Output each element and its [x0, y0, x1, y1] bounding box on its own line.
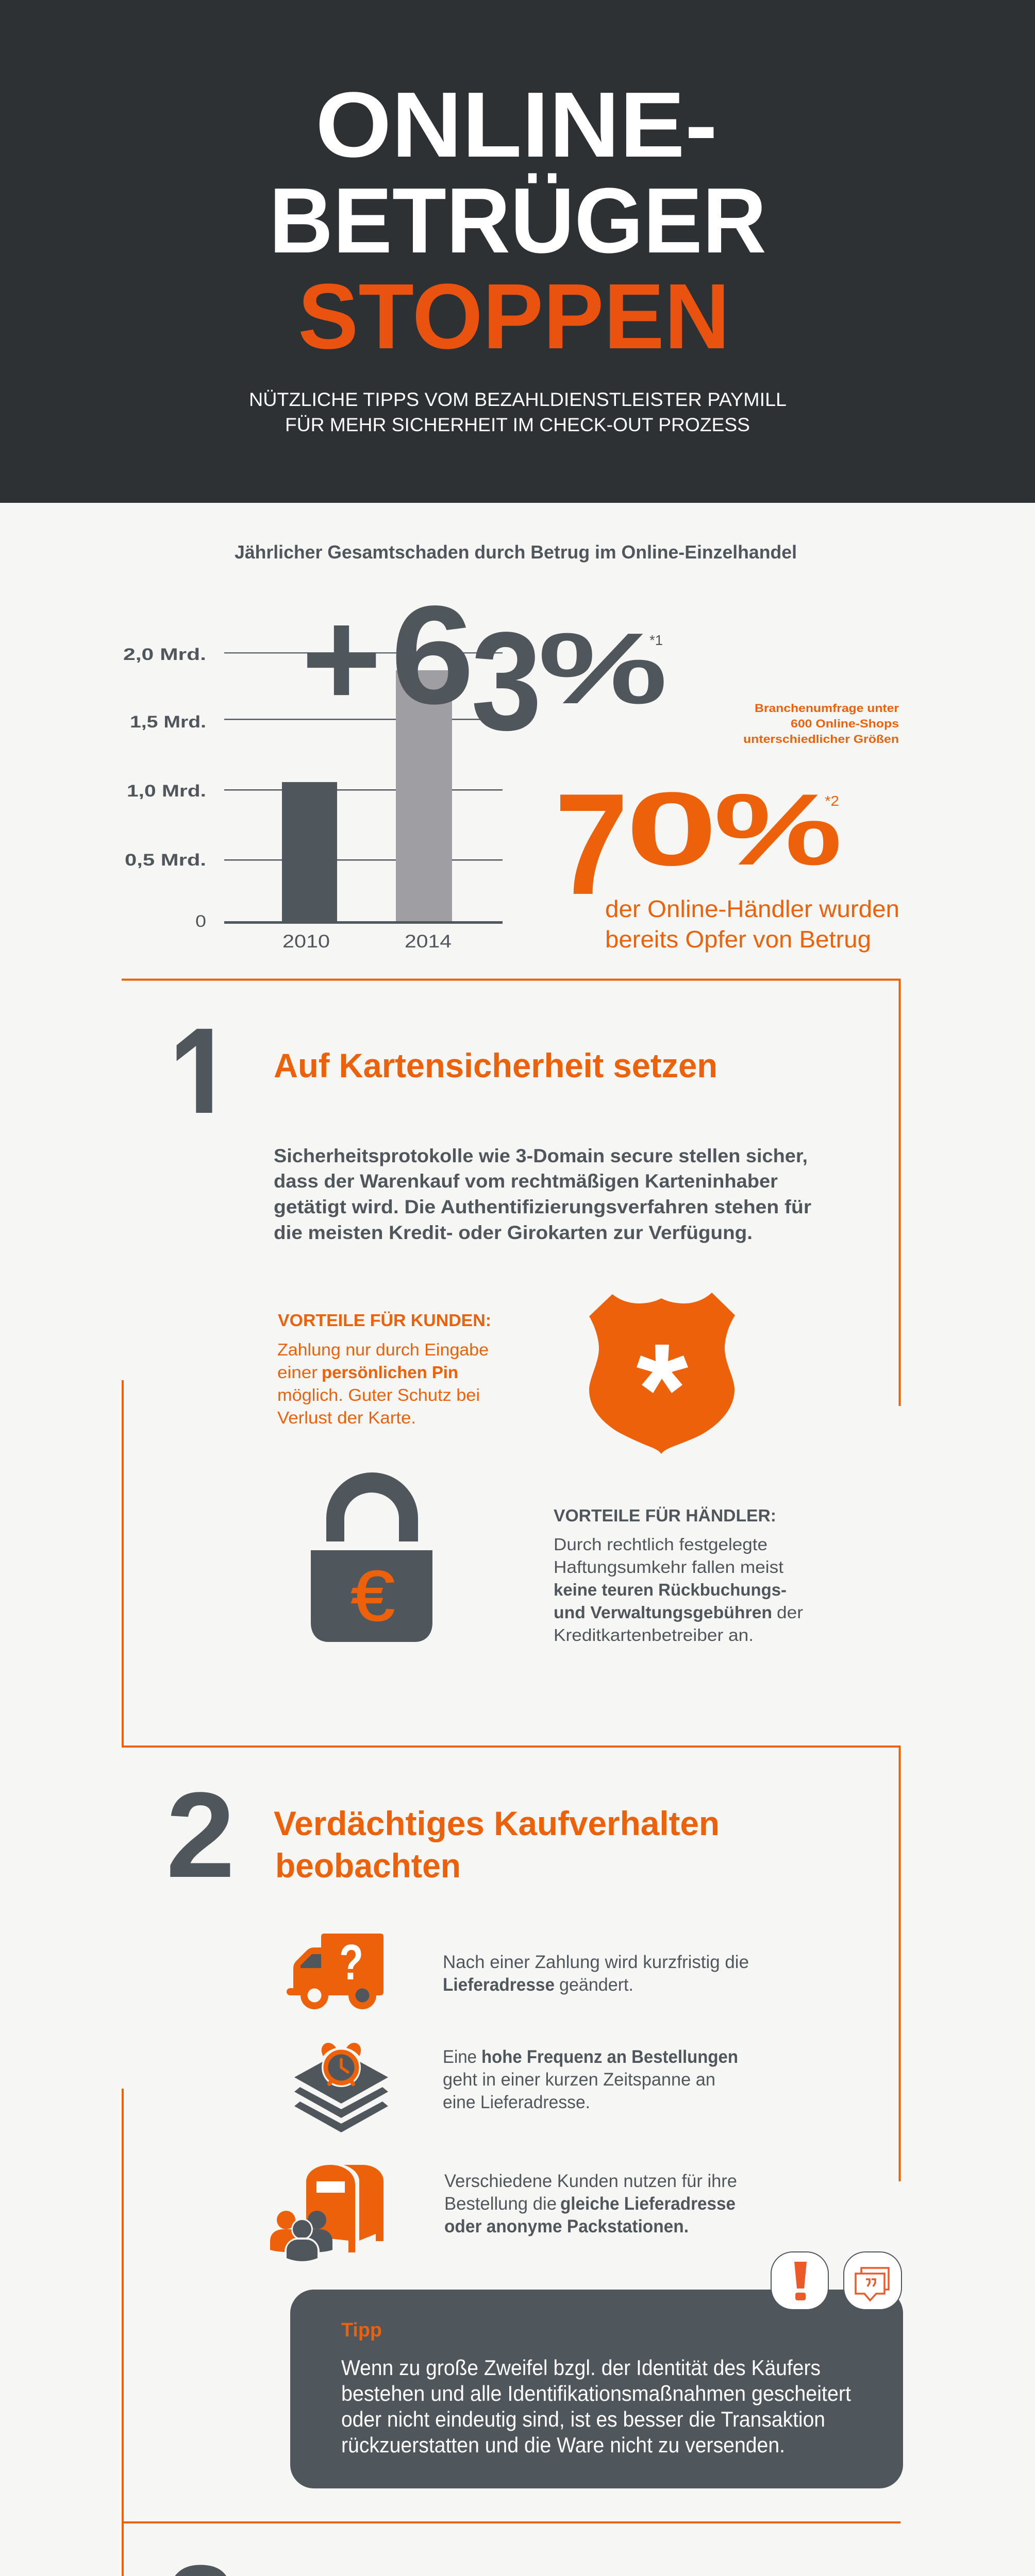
- intro text: getätigt wird. Die Authentifizierungsverfahren stehen für: [274, 1196, 811, 1217]
- icon: mailbox and customers: [270, 2165, 383, 2262]
- stat: +63%: 3: [471, 603, 542, 759]
- text: address change: Nach einer Zahlung wird kurzfristig die: [443, 1952, 749, 1972]
- merchant benefits: und Verwaltungsgebühren: [554, 1603, 772, 1622]
- text: address change: [443, 1952, 749, 1995]
- customer benefits: möglich. Guter Schutz bei: [277, 1385, 480, 1404]
- stat: 70%: 7: [555, 764, 628, 925]
- text: address change: Lieferadresse: [443, 1975, 555, 1995]
- icon: delivery truck: [287, 1934, 383, 2009]
- panel: section 2: [122, 1747, 903, 2522]
- stat: +63%: %: [538, 612, 667, 725]
- heading: [274, 1804, 720, 1885]
- icon: exclamation mark: [771, 2252, 828, 2310]
- panel: section 3: [122, 2522, 900, 2576]
- merchant benefits: keine teuren Rückbuchungs-: [554, 1580, 787, 1599]
- stat: +63%: 6: [391, 577, 474, 733]
- tip text: Wenn zu große Zweifel bzgl. der Identität des Käufers: [341, 2355, 821, 2380]
- year labels: [282, 931, 452, 952]
- subtitle: NÜTZLICHE TIPPS VOM BEZAHLDIENSTLEISTER PAYMILL: [249, 389, 787, 410]
- intro text: Sicherheitsprotokolle wie 3-Domain secure stellen sicher,: [274, 1145, 808, 1166]
- text: same address: oder anonyme Packstationen.: [444, 2216, 689, 2236]
- euro symbol: €: [351, 1556, 395, 1636]
- chart heading: Jährlicher Gesamtschaden durch Betrug im Online-Einzelhandel: [235, 541, 797, 563]
- callout: tip: [290, 2252, 903, 2488]
- text: address change: geändert.: [559, 1975, 633, 1995]
- customer benefits: Verlust der Karte.: [277, 1408, 416, 1427]
- axis labels: [123, 645, 206, 930]
- customer benefits: Zahlung nur durch Eingabe: [277, 1340, 489, 1359]
- text: same address: gleiche Lieferadresse: [560, 2194, 736, 2214]
- icon: padlock: [311, 1472, 432, 1642]
- customer benefits: einer: [277, 1363, 318, 1382]
- text: order frequency: hohe Frequenz an Bestellungen: [481, 2047, 738, 2067]
- intro text: die meisten Kredit- oder Girokarten zur Verfügung.: [274, 1222, 753, 1243]
- bar chart: [123, 645, 503, 952]
- stat caption: [605, 895, 899, 953]
- text: same address: Bestellung die: [444, 2194, 557, 2214]
- number 1: 1: [169, 997, 234, 1161]
- customer benefits: VORTEILE FÜR KUNDEN:: [278, 1311, 491, 1330]
- stat: 70%: [555, 764, 842, 925]
- bar 2010: [282, 782, 337, 921]
- axis labels: 1,0 Mrd.: [127, 782, 206, 800]
- text: order frequency: eine Lieferadresse.: [443, 2092, 590, 2112]
- customer benefits: [277, 1311, 491, 1427]
- survey note: [743, 702, 899, 745]
- icon: shield: [589, 1293, 735, 1454]
- survey note: unterschiedlicher Größen: [743, 733, 899, 745]
- icon: speech bubbles: [844, 2252, 902, 2310]
- title: STOPPEN: [298, 265, 730, 368]
- stat: +63%: [302, 577, 667, 759]
- panel: section 1: [122, 980, 900, 1747]
- title: ONLINE-: [315, 73, 717, 177]
- tip text: rückzuerstatten und die Ware nicht zu versenden.: [341, 2433, 785, 2457]
- merchant benefits: [554, 1506, 803, 1645]
- intro text: dass der Warenkauf vom rechtmäßigen Karteninhaber: [274, 1171, 778, 1192]
- intro text: [274, 1145, 811, 1243]
- text: order frequency: [443, 2047, 738, 2112]
- header banner: [0, 0, 1035, 503]
- heading: beobachten: [275, 1846, 461, 1885]
- stat: 70%: 0: [626, 771, 717, 888]
- year labels: 2014: [405, 931, 452, 952]
- tip text: oder nicht eindeutig sind, ist es besser die Transaktion: [341, 2407, 825, 2431]
- subtitle: FÜR MEHR SICHERHEIT IM CHECK-OUT PROZESS: [285, 414, 750, 435]
- merchant benefits: Durch rechtlich festgelegte: [554, 1535, 767, 1554]
- tip heading: Tipp: [341, 2319, 382, 2341]
- text: same address: [444, 2171, 737, 2236]
- merchant benefits: VORTEILE FÜR HÄNDLER:: [554, 1506, 776, 1525]
- survey note: Branchenumfrage unter: [755, 702, 899, 715]
- title: BETRÜGER: [269, 169, 766, 273]
- merchant benefits: Kreditkartenbetreiber an.: [554, 1625, 754, 1645]
- merchant benefits: der: [777, 1603, 803, 1622]
- title: [269, 73, 766, 368]
- axis labels: 0: [195, 912, 206, 930]
- number 2: 2: [166, 1767, 235, 1903]
- year labels: 2010: [282, 931, 330, 952]
- question mark: ?: [339, 1934, 363, 1990]
- text: order frequency: Eine: [443, 2047, 477, 2067]
- tip text: [341, 2355, 851, 2457]
- bar 2014: [396, 670, 452, 921]
- survey note: 600 Online-Shops: [791, 717, 899, 730]
- stat caption: der Online-Händler wurden: [605, 895, 899, 922]
- axis labels: 1,5 Mrd.: [130, 713, 206, 731]
- merchant benefits: Haftungsumkehr fallen meist: [554, 1557, 783, 1577]
- heading: Auf Kartensicherheit setzen: [274, 1046, 717, 1084]
- stat: 70%: %: [714, 773, 842, 886]
- axis labels: 0,5 Mrd.: [125, 851, 206, 869]
- stat: +63%: +: [302, 582, 381, 735]
- icon: stack with alarm clock: [294, 2043, 388, 2132]
- stat: 70%: *2: [825, 793, 839, 809]
- axis labels: 2,0 Mrd.: [123, 645, 206, 664]
- stat caption: bereits Opfer von Betrug: [605, 926, 871, 953]
- heading: Verdächtiges Kaufverhalten: [274, 1804, 720, 1842]
- subtitle: [249, 389, 787, 435]
- customer benefits: persönlichen Pin: [322, 1363, 458, 1382]
- stat: +63%: *1: [649, 632, 663, 648]
- text: order frequency: geht in einer kurzen Zeitspanne an: [443, 2070, 715, 2090]
- text: same address: Verschiedene Kunden nutzen für ihre: [444, 2171, 737, 2191]
- tip text: bestehen und alle Identifikationsmaßnahmen gescheitert: [341, 2381, 851, 2405]
